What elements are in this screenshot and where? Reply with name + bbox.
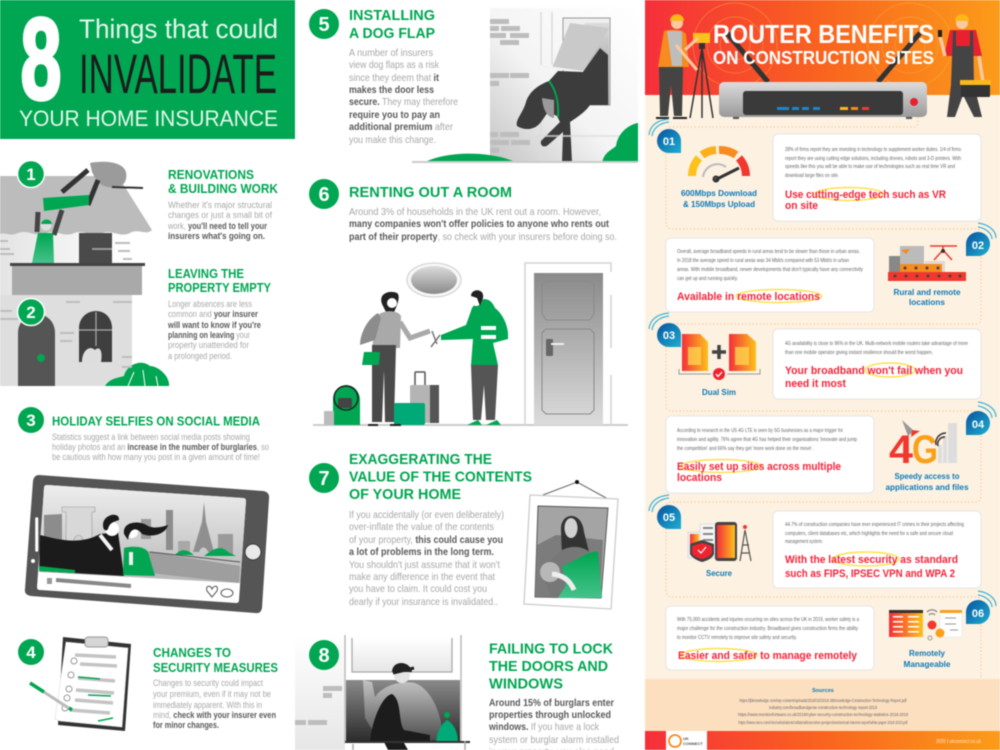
text block: installing a dog flap: A number of insurers xyxy=(349,47,433,59)
benefit 03 card xyxy=(773,329,981,399)
title xyxy=(713,19,934,68)
text block: renovations: changes or just a small bit of xyxy=(168,210,272,220)
number badge 6: 6 xyxy=(318,184,330,206)
badge 03 xyxy=(649,313,681,347)
badge 06: 06 xyxy=(972,608,984,620)
icon: remote management dashboard xyxy=(889,610,962,640)
text block: leaving the property empty: common and your insurer xyxy=(168,309,258,319)
text block: failing to lock: THE DOORS AND xyxy=(489,658,608,675)
text block: failing to lock: properties through unlocked xyxy=(489,709,611,721)
panel: 8 things that could invalidate home insurance, left column xyxy=(0,0,295,750)
illustration: router with antennas xyxy=(719,33,927,119)
text block: installing a dog flap: INSTALLING xyxy=(349,7,435,24)
badge 02 xyxy=(966,223,996,256)
number badge 1: 1 xyxy=(26,165,36,184)
benefit 02 card: areas. With mobile broadband, newer developments that don't typically have any connectivity xyxy=(677,267,863,273)
number badge 8: 8 xyxy=(318,645,330,667)
benefit 01 card: 28% of firms report they are investing in technology to supplement worker duties. 1/4 of firms xyxy=(785,147,961,153)
label: speedy access xyxy=(886,472,969,492)
text block: exaggerating the value: If you accidentally (or even deliberately) xyxy=(349,509,504,521)
title: ON CONSTRUCTION SITES xyxy=(713,48,934,68)
text block: leaving the property empty: PROPERTY EMPTY xyxy=(168,280,271,295)
dotted connector path xyxy=(666,117,981,679)
benefit 02 card: can get up and running quickly. xyxy=(677,276,738,282)
number badge 5: 5 xyxy=(318,14,330,36)
text block: installing a dog flap: secure. They may therefore xyxy=(349,96,458,108)
title banner xyxy=(0,0,295,139)
benefit 02 card: Overall, average broadband speeds in rural areas tend to be slower than those in urban areas. xyxy=(677,249,860,255)
text block: holiday selfies: holiday photos and an increase in the number of burglaries, so xyxy=(52,442,269,452)
number badge 8 xyxy=(309,640,339,670)
illustration: clipboard checklist and pen xyxy=(30,637,131,731)
text block: exaggerating the value: of your property, this could cause you xyxy=(349,534,503,546)
number badge 2: 2 xyxy=(26,303,36,322)
label: remotely manageable: Remotely xyxy=(909,649,946,658)
benefit 06 card xyxy=(666,606,874,670)
benefit 05 card: such as FIPS, IPSEC VPN and WPA 2 xyxy=(785,568,955,580)
title: ROUTER BENEFITS xyxy=(713,19,934,49)
badge 01: 01 xyxy=(663,136,675,148)
text block: exaggerating the value: VALUE OF THE CONTENTS xyxy=(349,468,532,486)
text block: leaving the property empty: LEAVING THE xyxy=(168,266,244,281)
text block: exaggerating the value: make any difference in the event that xyxy=(349,571,495,583)
benefit 04 card: According to research in the US 4G LTE is seen by SG businesses as a major trigger for xyxy=(677,428,843,434)
benefit 03 card: Your broadband won't fail when you xyxy=(785,365,963,377)
text block: renovations: RENOVATIONS xyxy=(168,167,254,182)
benefit 03 card: need it most xyxy=(785,378,846,390)
label: secure: Secure xyxy=(706,569,733,578)
benefit 02 card: In 2018 the average speed in rural areas was 34 Mbit/s compared with 53 Mbit/s in urban xyxy=(677,258,849,264)
benefit 02 card: Available in remote locations xyxy=(677,291,820,303)
label: rural and remote xyxy=(894,288,961,307)
text block: leaving the property empty xyxy=(167,266,271,361)
benefit 06 card: to monitor CCTV remotely to improve site safety and security. xyxy=(677,635,797,641)
text block: installing a dog flap: require you to pay an xyxy=(349,109,440,121)
text block: holiday selfies: be cautious with how many you post in a given amount of time! xyxy=(52,452,260,462)
badge 01 xyxy=(649,119,681,153)
label: remotely manageable xyxy=(904,649,951,669)
number badge 3: 3 xyxy=(26,411,36,430)
number badge 3 xyxy=(18,407,44,433)
text block: renting out a room: RENTING OUT A ROOM xyxy=(349,184,512,201)
icon: speed gauge xyxy=(692,150,746,182)
benefit 05 card: With the latest security as standard xyxy=(785,554,958,566)
sources band: https://www.mentionfortware.co.uk/2019/cyber-security-construction-technology-statistics-2018-2019 xyxy=(738,712,909,717)
sources band: Sources xyxy=(812,688,834,694)
benefit 02 card xyxy=(666,238,874,312)
text block: exaggerating the value: You shouldn't just assume that it won't xyxy=(349,559,500,571)
label: 600Mbps: 600Mbps Download xyxy=(681,189,757,198)
text block: holiday selfies: Statistics suggest a link between social media posts showing xyxy=(52,432,250,442)
text block: renovations: insurers what's going on. xyxy=(168,231,265,241)
text block: holiday selfies: HOLIDAY SELFIES ON SOCIAL MEDIA xyxy=(52,414,261,428)
benefit 06 card: major challenge for the construction industry. Broadband gives construction firms the ability xyxy=(677,626,858,632)
text block: installing a dog flap: view dog flaps as a risk xyxy=(349,59,440,71)
footer xyxy=(645,731,1000,750)
badge 02: 02 xyxy=(972,240,984,252)
sources band: industry.com/broadbandgenie-construction-technology-report-2019 xyxy=(769,705,878,710)
text block: exaggerating the value xyxy=(349,451,532,608)
text block: failing to lock: Around 15% of burglars enter xyxy=(489,697,614,709)
text block: changes to security measures: immediately apparent. With this in xyxy=(153,700,262,710)
number badge 4 xyxy=(18,639,44,665)
text block: renting out a room: part of their property, so check with your insurers before doing so. xyxy=(349,231,617,243)
logo: UK Connect: UK xyxy=(683,736,689,741)
benefit 04 card: the competition' and 66% say they get 'more work done on the move'. xyxy=(677,446,813,452)
number badge 1 xyxy=(18,160,44,188)
benefit 04 card: Easily set up sites across multiple xyxy=(677,461,841,473)
illustration: worker with toolbox and phone xyxy=(938,14,991,117)
text block: changes to security measures: Changes to security could impact xyxy=(153,678,263,688)
text block: installing a dog flap: you make this change. xyxy=(349,134,436,146)
text block: renting out a room: Around 3% of households in the UK rent out a room. However, xyxy=(349,206,601,218)
text block: leaving the property empty: property unattended for xyxy=(168,340,249,350)
benefit 04 card: innovation and agility. 76% agree that 4G has helped their organisations 'innovate and jump xyxy=(677,437,857,443)
text block: failing to lock: windows. If you have a lock xyxy=(488,721,600,733)
text block: leaving the property empty: will want to know if you're xyxy=(167,320,261,330)
benefit 01 card: report they are using cutting edge solutions, including drones, robots and 3-D printers. With xyxy=(785,156,961,162)
text block: failing to lock: system or burglar alarm installed xyxy=(489,734,619,746)
text block: exaggerating the value: dearly if your insurance is invalidated.. xyxy=(349,596,498,608)
number badge 2 xyxy=(18,298,44,326)
text block: renovations: work, you'll need to tell your xyxy=(167,221,267,231)
text block: failing to lock: WINDOWS xyxy=(489,676,563,692)
text block: installing a dog flap xyxy=(349,7,458,146)
text block: changes to security measures: your premium, even if it may not be xyxy=(153,689,271,699)
text block: renovations: & BUILDING WORK xyxy=(168,181,279,196)
panel: router benefits on construction sites, right column xyxy=(645,0,1000,750)
illustration: dog passing through flap xyxy=(412,8,638,163)
sources band xyxy=(645,679,1000,731)
benefit 04 card xyxy=(666,416,874,493)
label: rural and remote: locations xyxy=(909,298,946,307)
icon: 4G with rocket and signal bars: 4 xyxy=(889,428,914,472)
text block: installing a dog flap: additional premium after xyxy=(349,121,453,133)
badge 06 xyxy=(966,591,996,624)
illustration: burglar climbing through window xyxy=(295,635,470,750)
label: 600Mbps: & 150Mbps Upload xyxy=(683,200,755,209)
text block: installing a dog flap: since they deem that it xyxy=(349,72,439,84)
text block: renting out a room: many companies won't offer policies to anyone who rents out xyxy=(349,218,609,230)
text block: failing to lock: FAILING TO LOCK xyxy=(489,640,613,658)
benefit 01 card: download large files on site. xyxy=(785,173,839,179)
label: 600Mbps xyxy=(681,189,757,209)
badge 04 xyxy=(966,402,996,435)
icon: security with phone and tower xyxy=(688,522,751,562)
text block: leaving the property empty: a prolonged period. xyxy=(168,351,232,361)
number badge 6 xyxy=(309,179,339,209)
illustration: house with roof repair and empty property xyxy=(0,162,169,386)
title banner: INVALIDATE xyxy=(79,42,277,105)
benefit 01 card xyxy=(773,134,981,221)
icon: dual SIM xyxy=(679,334,760,380)
benefit 05 card: computers, client databases etc, which highlights the need for a safe and secure cloud xyxy=(785,531,953,537)
icon: rural site with drone xyxy=(888,246,966,281)
benefit 01 card: Use cutting-edge tech such as VR xyxy=(785,189,946,201)
text block: changes to security measures: SECURITY MEASURES xyxy=(153,660,278,675)
icon: 4G with rocket and signal bars xyxy=(889,420,957,472)
badge 05 xyxy=(649,495,681,529)
text block: exaggerating the value: you have to claim. It could cost you xyxy=(349,583,487,595)
text block: changes to security measures: mind, check with your insurer even xyxy=(153,710,276,720)
text block: renovations: Whether it's major structural xyxy=(168,200,272,210)
label: rural and remote: Rural and remote xyxy=(894,288,961,297)
benefit 03 card: 4G availability is close to 96% in the UK. Multi-network mobile routers take advantage of more xyxy=(785,341,968,347)
benefit 01 card: on site xyxy=(785,200,818,212)
label: remotely manageable: Manageable xyxy=(904,660,951,669)
text block: exaggerating the value: EXAGGERATING THE xyxy=(349,451,492,468)
text block: changes to security measures: CHANGES TO xyxy=(153,645,231,660)
benefit 05 card xyxy=(773,511,981,588)
number badge 7: 7 xyxy=(318,468,330,490)
badge 05: 05 xyxy=(663,512,675,524)
number badge 5 xyxy=(309,9,339,39)
benefit 03 card: than one mobile operator giving instant resilience should the worst happen. xyxy=(785,350,933,356)
illustration: framed Mona Lisa xyxy=(524,480,618,609)
sources band: https://www.cisco.com/c/en/us/solutions/collateral/executive-perspectives/annual-internet-report/white-paper-2018-2023.pdf xyxy=(738,720,908,725)
text block: leaving the property empty: Longer absences are less xyxy=(168,299,252,309)
title banner: YOUR HOME INSURANCE xyxy=(19,106,278,131)
footer: 2020 | ukconnect.co.uk xyxy=(936,739,981,745)
text block: failing to lock xyxy=(488,640,619,750)
label: speedy access: applications and files xyxy=(886,483,969,492)
illustration: handing over keys with door and luggage xyxy=(313,263,628,426)
badge 03: 03 xyxy=(663,330,675,342)
illustration: surveyor with tripod xyxy=(656,14,713,118)
number badge 4: 4 xyxy=(26,643,36,662)
benefit 05 card: 44.7% of construction companies have ever experienced IT crimes in their projects affecting xyxy=(785,522,964,528)
text block: installing a dog flap: makes the door less xyxy=(349,84,434,96)
text block: exaggerating the value: a lot of problems in the long term. xyxy=(349,546,494,558)
benefit 04 card: locations xyxy=(677,472,722,484)
title banner: Things that could xyxy=(79,14,278,44)
text block: changes to security measures: for minor changes. xyxy=(153,720,219,730)
panel: middle column continuing insurance tips xyxy=(295,0,645,750)
benefit 06 card: With 75,000 accidents and injuries occurring on sites across the UK in 2019, worker safety is a xyxy=(677,617,859,623)
illustration: phone showing holiday selfie xyxy=(25,475,269,613)
number badge 7 xyxy=(309,463,339,493)
badge 04: 04 xyxy=(972,419,985,431)
sources band: https://jbknowledge.com/wp-content/uploads/2018/10/2018-JBKnowledge-Construction-Technology-Report.pdf xyxy=(740,698,907,703)
text block: changes to security measures xyxy=(153,645,278,730)
logo: UK Connect xyxy=(666,731,707,750)
label: dual sim: Dual Sim xyxy=(702,388,736,397)
text block: renovations xyxy=(167,167,279,241)
text block: leaving the property empty: planning on leaving your xyxy=(168,330,250,340)
benefit 01 card: speeds like this you will be able to make use of technologies such as real time VR and xyxy=(785,164,955,170)
text block: installing a dog flap: A DOG FLAP xyxy=(349,25,435,42)
logo: UK Connect: CONNECT xyxy=(683,741,703,746)
benefit 06 card: Easier and safer to manage remotely xyxy=(678,650,858,662)
text block: holiday selfies xyxy=(52,414,269,462)
label: speedy access: Speedy access to xyxy=(894,472,960,481)
icon: 4G with rocket and signal bars: G xyxy=(912,428,938,472)
text block: exaggerating the value: over-inflate the value of the contents xyxy=(349,521,494,533)
benefit 05 card: management system. xyxy=(785,539,823,545)
text block: exaggerating the value: OF YOUR HOME xyxy=(349,486,461,503)
header gradient with signal ripples xyxy=(645,0,1000,95)
text block: renting out a room xyxy=(349,184,617,243)
